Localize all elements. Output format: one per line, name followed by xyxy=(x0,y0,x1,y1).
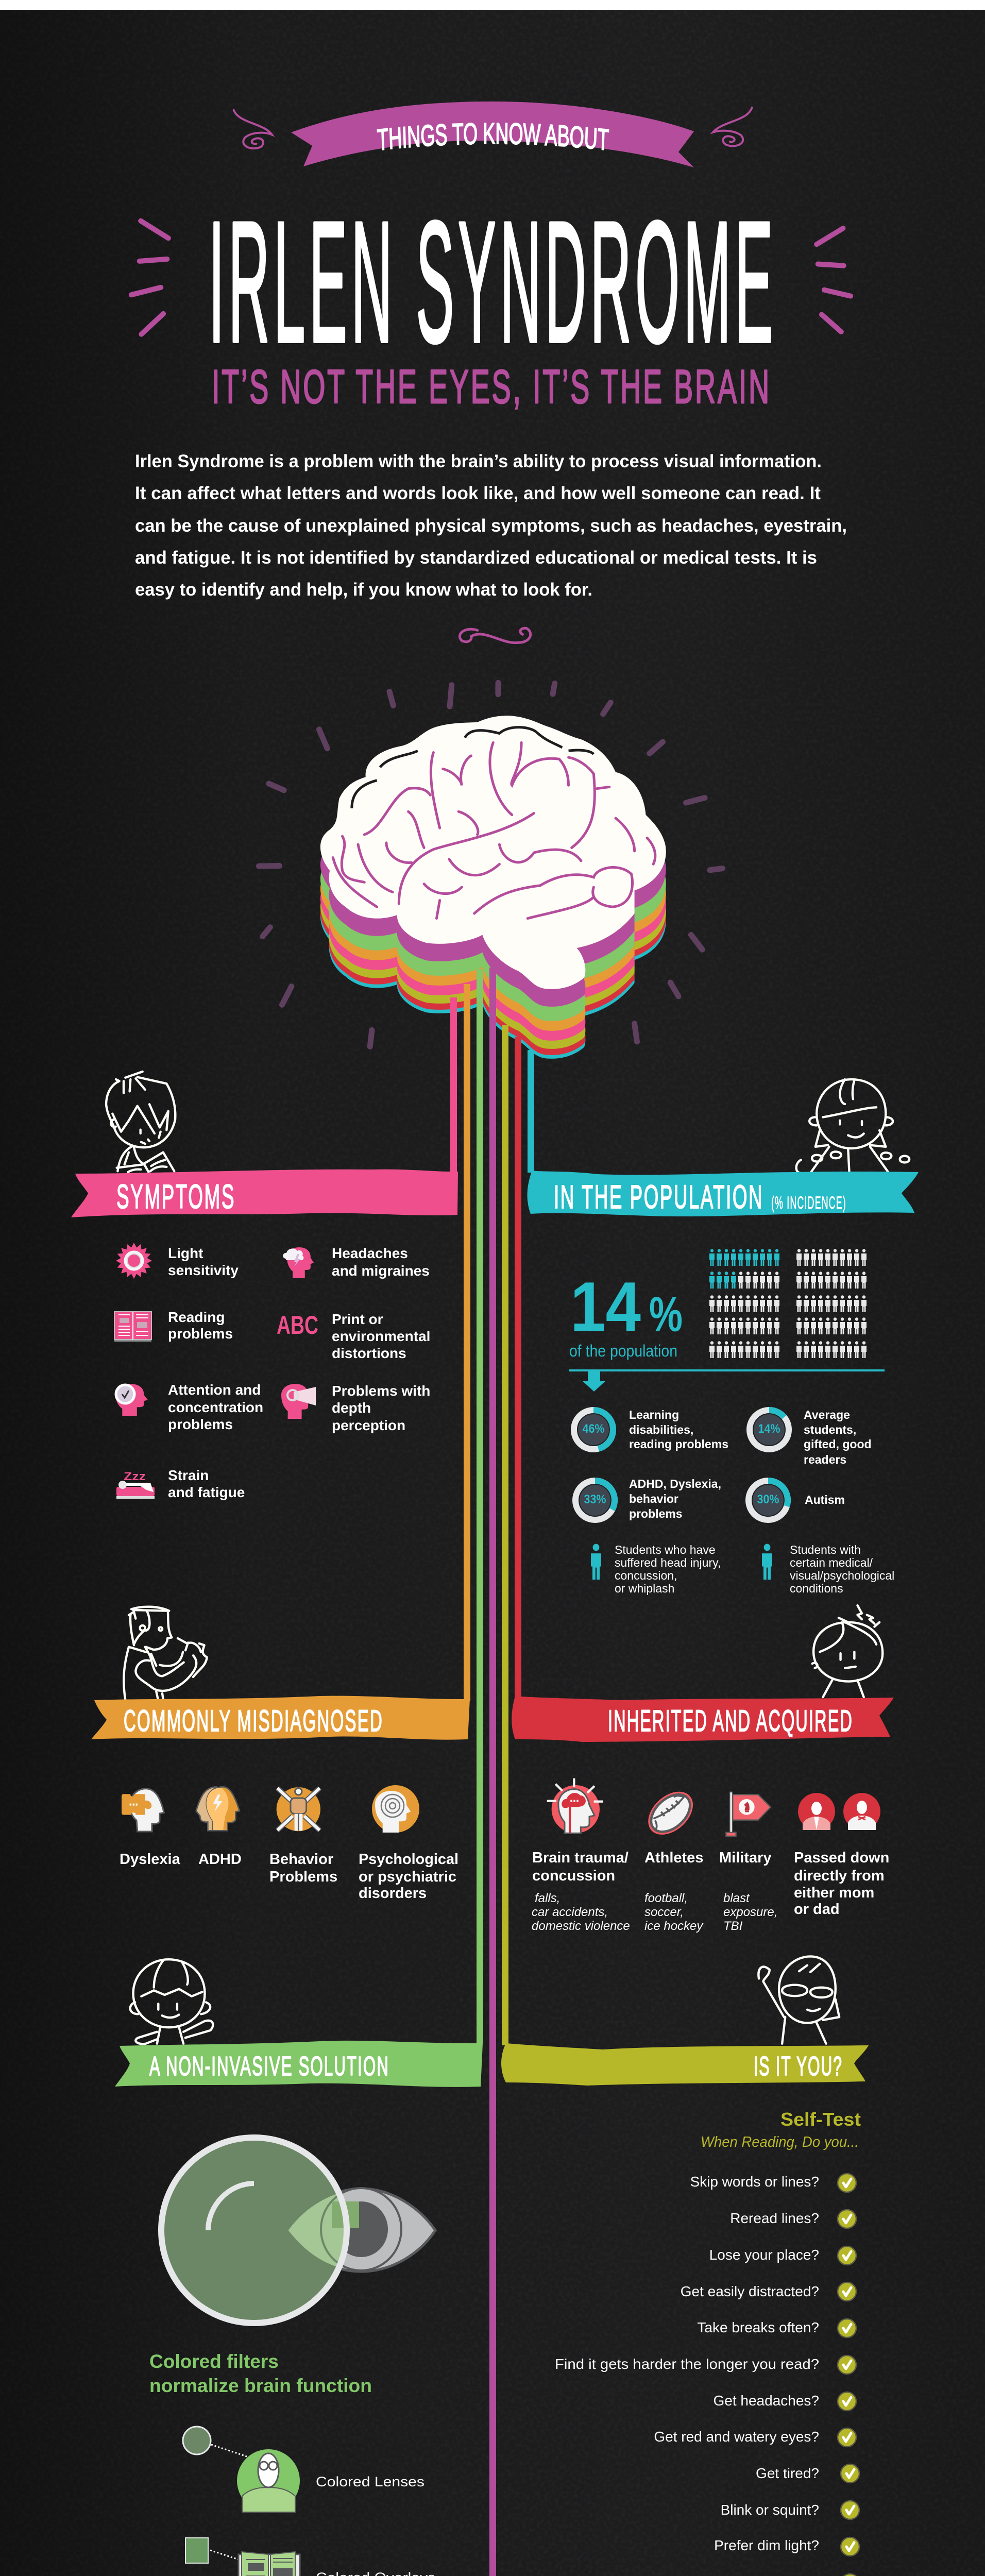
detail: causes of trauma: domestic violence xyxy=(532,1919,630,1933)
label: medical conditions students: conditions xyxy=(790,1582,843,1595)
heading: population banner: IN THE POPULATION xyxy=(554,1178,763,1215)
checklist: Find it gets harder the longer you read? xyxy=(555,2356,819,2372)
header ribbon: things to know about xyxy=(291,101,694,167)
label: average students: students, xyxy=(804,1423,856,1436)
subheading: when reading: When Reading, Do you... xyxy=(701,2134,859,2150)
panel: commonly misdiagnosed xyxy=(91,1607,470,1902)
detail: sports: football, xyxy=(644,1891,688,1905)
intro paragraph: easy to identify and help, if you know what to look for. xyxy=(135,580,592,600)
ornament: squiggle xyxy=(460,628,531,643)
label: behavior problems: Behavior xyxy=(269,1851,333,1868)
heading: is it you banner xyxy=(501,2043,869,2086)
item: coloured overlays xyxy=(185,2538,435,2576)
icon: attention head with clock xyxy=(115,1384,148,1416)
panel: a non-invasive solution xyxy=(115,1959,483,2576)
intro paragraph: Irlen Syndrome is a problem with the brain’s ability to process visual information. xyxy=(135,451,822,471)
icon: teal person medical conditions xyxy=(762,1544,772,1580)
detail: military causes: TBI xyxy=(723,1919,743,1933)
checklist: Prefer dim light? xyxy=(714,2537,819,2553)
panel: inherited and acquired xyxy=(512,1605,894,1933)
checklist: Skip words or lines? xyxy=(690,2174,819,2190)
label: head injury students: Students who have xyxy=(615,1543,716,1556)
icon: military flag xyxy=(726,1792,771,1836)
icon: dyslexia head with puzzle piece xyxy=(122,1789,164,1832)
ornaments: spokes beside title xyxy=(131,221,851,334)
detail: military causes: exposure, xyxy=(723,1905,777,1919)
chalk character: girl with glasses raising hand xyxy=(758,1956,839,2044)
label: behavior problems: Problems xyxy=(269,1869,337,1885)
symptom: light sensitivity: sensitivity xyxy=(168,1262,239,1278)
icon: brain trauma head xyxy=(547,1778,603,1833)
statistic: 14 percent: 14 xyxy=(570,1267,641,1346)
panel: in the population xyxy=(528,1079,919,1595)
symptom: depth perception: Problems with xyxy=(332,1383,430,1399)
icon: mother and father xyxy=(798,1793,880,1830)
statistic: 14 percent xyxy=(569,1267,683,1360)
checklist: Get tired? xyxy=(756,2465,819,2481)
donut: 33 percent ADHD dyslexia xyxy=(575,1481,615,1520)
chalk character: shrugging boy xyxy=(130,1959,213,2044)
symptom: headaches: Headaches xyxy=(332,1245,408,1261)
label: autism: Autism xyxy=(805,1493,845,1506)
icon: sleeping in bed: Zzz xyxy=(124,1470,146,1483)
pictogram: 100 people, 14 highlighted xyxy=(709,1249,867,1358)
label: medical conditions students: visual/psychological xyxy=(790,1569,894,1582)
heading: inherited banner xyxy=(512,1696,894,1742)
symptom: attention: problems xyxy=(168,1416,233,1432)
detail: sports: soccer, xyxy=(644,1905,684,1919)
detail: causes of trauma: falls, xyxy=(535,1891,560,1905)
symptom: headaches: and migraines xyxy=(332,1263,430,1279)
intro paragraph: can be the cause of unexplained physical symptoms, such as headaches, eyestrain, xyxy=(135,516,847,536)
label: passed down: or dad xyxy=(794,1901,840,1918)
chalk character: boy reading xyxy=(106,1072,175,1172)
icon: ADHD double head xyxy=(196,1787,240,1831)
icon: sleeping in bed xyxy=(116,1470,155,1499)
label: average students: Average xyxy=(804,1408,850,1421)
panel: symptoms xyxy=(71,1072,458,1500)
label: learning disabilities: Learning xyxy=(629,1408,679,1421)
checklist: Get headaches? xyxy=(713,2393,819,2409)
symptom: attention: Attention and xyxy=(168,1382,261,1398)
label: passed down: directly from xyxy=(794,1868,885,1884)
heading: self-test: Self-Test xyxy=(780,2109,861,2130)
donut: 14 percent average students: 14% xyxy=(758,1422,780,1436)
detail: military causes: blast xyxy=(723,1891,750,1905)
illustration: lens over eye xyxy=(161,2138,435,2323)
label: psychological disorders: disorders xyxy=(359,1885,427,1902)
symptom: print distortions: Print or xyxy=(332,1311,383,1327)
label: psychological disorders: or psychiatric xyxy=(359,1869,456,1885)
symptom: depth perception: depth xyxy=(332,1400,371,1416)
header ribbon: things to know about: THINGS TO KNOW ABOUT xyxy=(377,123,609,150)
detail: sports: ice hockey xyxy=(644,1919,704,1933)
symptom: attention: concentration xyxy=(168,1399,263,1415)
donut: 30 percent autism xyxy=(749,1481,788,1520)
heading: misdiagnosed banner: COMMONLY MISDIAGNOSED xyxy=(124,1704,383,1738)
label: dyslexia: Dyslexia xyxy=(120,1851,181,1868)
icon: distorted ABC: ABC xyxy=(277,1311,318,1340)
label: learning disabilities: disabilities, xyxy=(629,1423,693,1436)
label: ADHD dyslexia: problems xyxy=(629,1507,683,1520)
heading: solution banner: A NON-INVASIVE SOLUTION xyxy=(149,2052,389,2081)
brain top surface xyxy=(320,716,666,989)
symptom: print distortions: distortions xyxy=(332,1345,406,1361)
label: ADHD: ADHD xyxy=(198,1851,242,1868)
label: head injury students: or whiplash xyxy=(615,1582,674,1595)
checklist: Reread lines? xyxy=(730,2210,819,2226)
label: passed down: either mom xyxy=(794,1885,874,1901)
checklist: Lose your place? xyxy=(709,2247,819,2263)
donut: 46 percent learning disabilities xyxy=(574,1410,613,1449)
checklist xyxy=(555,2174,859,2576)
chalk character: girl xyxy=(796,1079,909,1173)
label: ADHD dyslexia: ADHD, Dyslexia, xyxy=(629,1477,721,1490)
callout: coloured filters: normalize brain function xyxy=(149,2375,372,2396)
icon: light sensitivity sun xyxy=(116,1243,152,1279)
symptom: reading problems: problems xyxy=(168,1326,233,1342)
intro paragraph: and fatigue. It is not identified by standardized educational or medical tests. It is xyxy=(135,548,817,568)
ornaments: swirls beside ribbon xyxy=(234,108,752,148)
chalk character: woman with headache xyxy=(812,1605,882,1697)
checklist: Blink or squint? xyxy=(721,2502,819,2518)
label: psychological disorders: Psychological xyxy=(359,1851,458,1868)
label: average students: readers xyxy=(804,1453,846,1466)
checklist: Get red and watery eyes? xyxy=(654,2429,819,2445)
checklist: Take breaks often? xyxy=(697,2319,819,2335)
icon: teal person head injury xyxy=(591,1544,601,1580)
icon: behavior figure xyxy=(277,1787,320,1831)
label: brain trauma: Brain trauma/ xyxy=(532,1850,629,1866)
symptom: print distortions: environmental xyxy=(332,1328,430,1344)
label: head injury students: concussion, xyxy=(615,1569,677,1582)
heading: symptoms banner: SYMPTOMS xyxy=(116,1177,235,1215)
symptom: depth perception: perception xyxy=(332,1417,405,1433)
heading: misdiagnosed banner xyxy=(91,1696,470,1740)
icon: depth perception head xyxy=(281,1384,316,1419)
label: average students: gifted, good xyxy=(804,1437,872,1451)
arrow: divider pointing down xyxy=(569,1369,885,1392)
brain illustration with connector lines xyxy=(259,683,722,2576)
chalk character: man thinking xyxy=(124,1607,207,1700)
donut: 14 percent average students xyxy=(750,1410,789,1449)
label: medical conditions students: Students with xyxy=(790,1543,861,1556)
label: medical conditions students: certain medical/ xyxy=(790,1556,873,1569)
checklist: Get easily distracted? xyxy=(681,2283,819,2299)
item: coloured lenses xyxy=(183,2427,424,2512)
label: learning disabilities: reading problems xyxy=(629,1437,728,1451)
label: military: Military xyxy=(719,1850,772,1866)
detail: causes of trauma: car accidents, xyxy=(532,1905,608,1919)
connector lines xyxy=(450,968,534,2576)
donut: 30 percent autism: 30% xyxy=(757,1493,779,1506)
icon: reading book xyxy=(114,1312,151,1342)
symptom: strain and fatigue: and fatigue xyxy=(168,1484,245,1500)
statistic: 14 percent: of the population xyxy=(569,1342,677,1360)
icon: football xyxy=(640,1783,701,1843)
label: athletes: Athletes xyxy=(644,1850,703,1866)
label: head injury students: suffered head injury, xyxy=(615,1556,721,1569)
icon: maze head xyxy=(372,1785,419,1833)
header section xyxy=(129,101,853,644)
item: coloured lenses: Colored Lenses xyxy=(316,2474,424,2489)
symptom: strain and fatigue: Strain xyxy=(168,1467,209,1483)
intro paragraph: It can affect what letters and words look like, and how well someone can read. It xyxy=(135,483,821,503)
donut: 46 percent learning disabilities: 46% xyxy=(582,1422,605,1436)
rays around brain xyxy=(259,683,722,1046)
symptom: light sensitivity: Light xyxy=(168,1245,203,1261)
heading: is it you banner: IS IT YOU? xyxy=(754,2052,843,2081)
callout: coloured filters: Colored filters xyxy=(149,2351,279,2372)
panel: is it you xyxy=(501,1956,869,2576)
heading: population banner: (% INCIDENCE) xyxy=(771,1193,846,1213)
heading: symptoms banner xyxy=(71,1170,458,1217)
label: ADHD dyslexia: behavior xyxy=(629,1492,678,1505)
label: brain trauma: concussion xyxy=(532,1868,615,1884)
heading: solution banner xyxy=(115,2041,483,2087)
label: passed down: Passed down xyxy=(794,1850,889,1866)
symptom: reading problems: Reading xyxy=(168,1309,225,1325)
statistic: 14 percent: % xyxy=(649,1287,683,1342)
coloured brain layers xyxy=(320,733,666,1059)
donut: 33 percent ADHD dyslexia: 33% xyxy=(584,1493,606,1506)
intro paragraph xyxy=(135,451,847,600)
icon: headache head xyxy=(283,1247,314,1278)
